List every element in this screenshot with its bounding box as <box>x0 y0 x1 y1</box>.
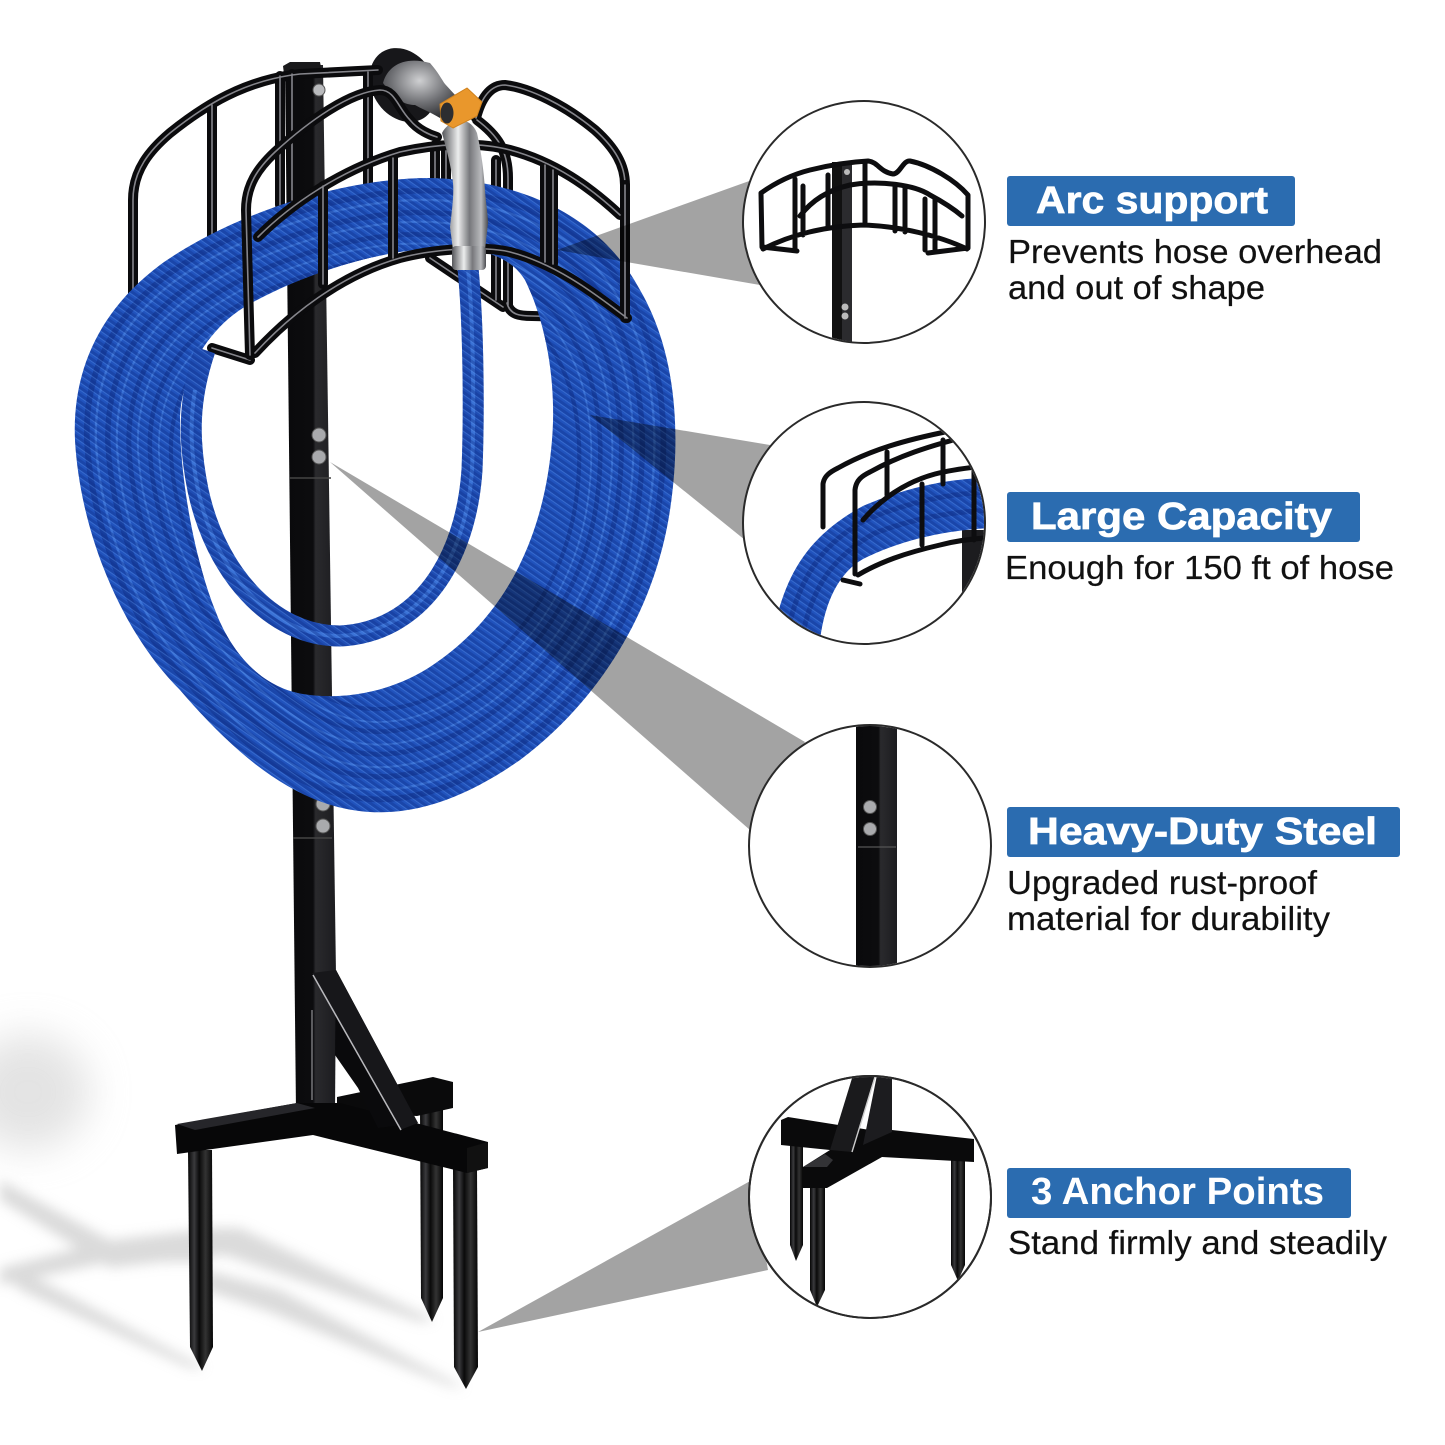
hanging inner hose loop <box>191 268 473 636</box>
text: arc support description: and out of shape <box>1008 269 1265 306</box>
label: large capacity: Large Capacity <box>1031 496 1332 538</box>
spray nozzle neck and trigger <box>440 88 488 270</box>
text: steel description <box>1007 864 1331 937</box>
main product: hose stand <box>74 48 676 1389</box>
callout beam: large capacity <box>590 415 770 540</box>
base arms and brace <box>175 970 488 1173</box>
callout beam: anchor points <box>478 1180 768 1332</box>
stand pole <box>283 62 336 1112</box>
label: 3 anchor points: 3 Anchor Points <box>1031 1171 1324 1213</box>
detail circle: arc support <box>743 101 985 352</box>
pole bolts <box>312 84 330 833</box>
nozzle head behind the front rail <box>356 35 456 135</box>
coiled blue garden hose <box>74 178 676 812</box>
label: large capacity <box>1007 492 1360 542</box>
label: heavy-duty steel: Heavy-Duty Steel <box>1028 811 1377 853</box>
detail circle: anchor points <box>749 1075 991 1318</box>
text: steel description: material for durability <box>1007 900 1331 937</box>
label: arc support <box>1007 176 1295 226</box>
callout beam: heavy-duty steel <box>330 462 805 830</box>
text: steel description: Upgraded rust-proof <box>1007 864 1318 901</box>
background shadow <box>0 1034 465 1388</box>
rack back rails <box>133 70 625 360</box>
label: heavy-duty steel <box>1007 807 1400 857</box>
detail circle: large capacity <box>743 402 990 644</box>
spikes <box>188 1105 478 1389</box>
text: arc support description <box>1008 233 1382 306</box>
text: large capacity description: Enough for 150 ft of hose <box>1005 549 1394 586</box>
callout beam: arc support <box>557 180 760 285</box>
label: arc support: Arc support <box>1036 180 1268 222</box>
detail circle: heavy-duty steel <box>749 720 991 970</box>
text: arc support description: Prevents hose overhead <box>1008 233 1382 270</box>
text: anchor description: Stand firmly and steadily <box>1008 1224 1388 1261</box>
rack front rails <box>246 90 627 355</box>
